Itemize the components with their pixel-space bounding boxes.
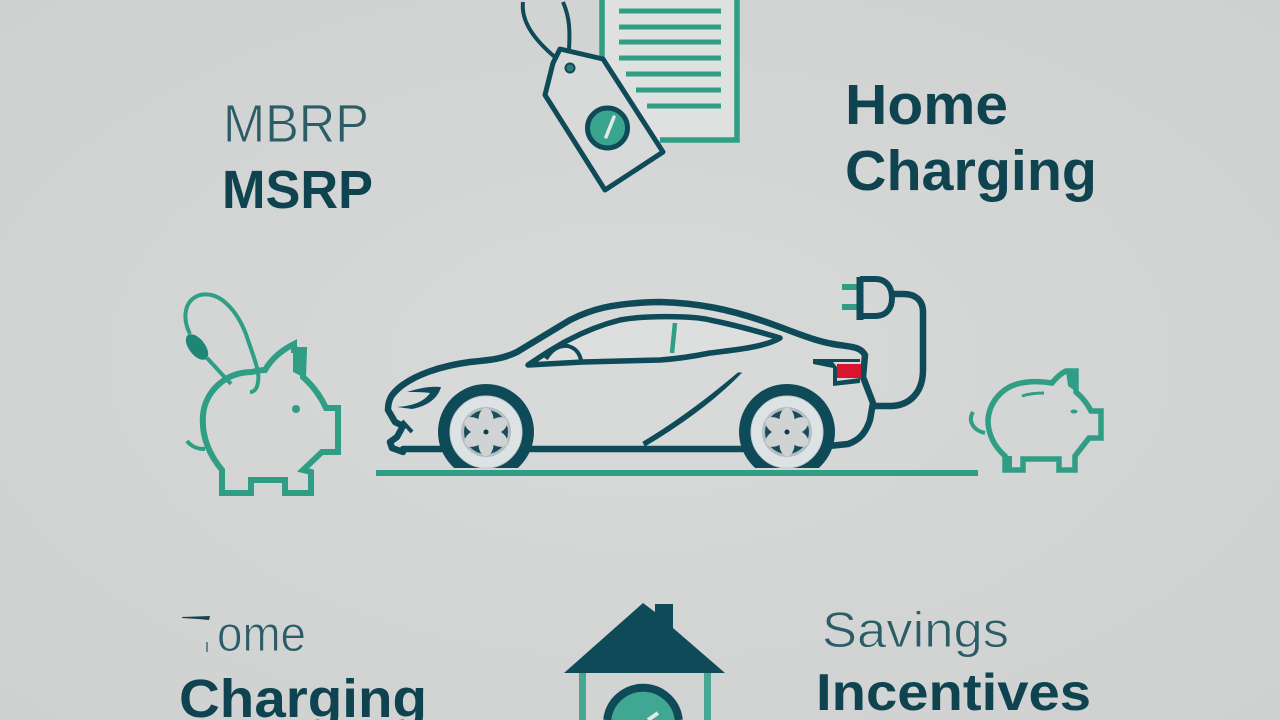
charging plug: [842, 277, 892, 320]
price tag: [545, 49, 663, 190]
badge: [607, 688, 679, 720]
side mirror: [546, 346, 581, 360]
label: MSRP: MSRP: [222, 160, 373, 220]
rear wheel: [739, 384, 835, 468]
icon: small piggy bank: [971, 371, 1101, 470]
house roof: [564, 603, 725, 673]
illustration: electric car: [388, 277, 923, 480]
house walls: [582, 672, 708, 720]
label: MBRP: MBRP: [223, 94, 369, 154]
label: Home Charging top right: [845, 73, 1097, 203]
window pillar: [672, 323, 675, 353]
car body: [388, 302, 873, 452]
label: Home Charging top right: Home: [845, 73, 1008, 137]
bumper intake: [402, 421, 412, 432]
icon: house with badge: [564, 603, 725, 720]
ground line: [376, 470, 978, 476]
label: Home partial: [182, 606, 306, 662]
price tag string: [523, 2, 569, 58]
window: [528, 317, 780, 365]
document sheet: [602, 0, 737, 140]
body crease: [643, 373, 741, 446]
label: Home partial: ome: [217, 606, 306, 662]
icon: document with price tag: [523, 0, 737, 190]
tail light: [813, 359, 861, 386]
icon: large piggy bank with cord: [181, 294, 338, 493]
label: Savings: Savings: [822, 602, 1009, 658]
label: Home Charging top right: Charging: [845, 139, 1097, 203]
headlight: [397, 387, 441, 409]
front wheel: [438, 384, 534, 468]
charging cable: [874, 294, 923, 406]
